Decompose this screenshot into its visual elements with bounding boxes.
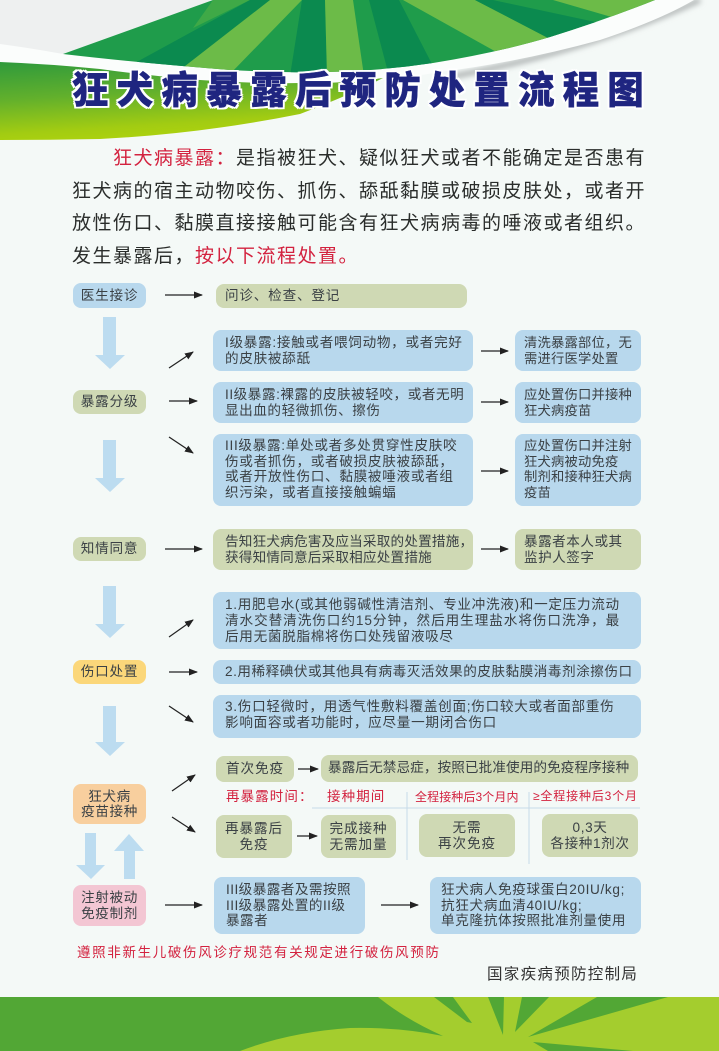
注射被动免疫制剂 label: 注射被动 <box>81 890 138 905</box>
暴露分级 label: 暴露分级 <box>81 394 138 409</box>
狂犬病疫苗接种 label: 疫苗接种 <box>81 804 138 819</box>
III级暴露 box: III级暴露:单处或者多处贯穿性皮肤咬 <box>225 438 457 453</box>
处置步骤3: 影响面容或者功能时，应尽量一期闭合伤口 <box>225 714 497 730</box>
处置步骤1 <box>213 592 641 649</box>
III级暴露者 box: 暴露者 <box>226 913 268 928</box>
发布机构: 国家疾病预防控制局 <box>487 966 638 983</box>
III级处置 box: 制剂和接种狂犬病 <box>524 469 632 484</box>
免疫制剂剂量 box: 狂犬病人免疫球蛋白20IU/kg; <box>441 882 625 897</box>
title: 狂犬病暴露后预防处置流程图 <box>72 69 652 112</box>
问诊 box <box>216 284 467 308</box>
再暴露后免疫 <box>216 815 292 858</box>
处置步骤1: 清水交替清洗伤口约15分钟，然后用生理盐水将伤口洗净，最 <box>225 613 620 628</box>
II级暴露 box <box>213 382 473 423</box>
无需再次免疫: 再次免疫 <box>438 836 496 850</box>
伤口处置 label <box>73 660 146 684</box>
intro text: 发生暴露后，按以下流程处置。 <box>72 246 359 267</box>
III级暴露者 box: III级暴露者及需按照 <box>226 882 351 897</box>
免疫制剂剂量 box <box>430 877 641 934</box>
III级暴露者 box <box>214 877 365 934</box>
首次免疫说明: 暴露后无禁忌症，按照已批准使用的免疫程序接种 <box>328 760 629 775</box>
III级处置 box: 应处置伤口并注射 <box>524 438 632 453</box>
table divider lines <box>312 792 640 864</box>
告知 box: 告知狂犬病危害及应当采取的处置措施， <box>225 534 473 549</box>
签字 box <box>515 529 641 570</box>
首次免疫: 首次免疫 <box>226 761 284 776</box>
II级处置 box: 狂犬病疫苗 <box>524 402 591 418</box>
注射被动免疫制剂 label: 免疫制剂 <box>81 906 138 920</box>
破伤风提示: 遵照非新生儿破伤风诊疗规范有关规定进行破伤风预防 <box>77 945 441 960</box>
intro text: 狂犬病暴露：是指被狂犬、疑似狂犬或者不能确定是否患有 <box>113 148 646 169</box>
III级暴露 box: 或者开放性伤口、黏膜被唾液或者组 <box>225 469 454 484</box>
intro text <box>72 148 646 267</box>
block arrows <box>76 317 144 879</box>
I级暴露 box <box>213 330 473 371</box>
intro text: 狂犬病的宿主动物咬伤、抓伤、舔舐黏膜或破损皮肤处，或者开 <box>72 181 646 202</box>
I级暴露 box: 的皮肤被舔舐 <box>225 350 311 366</box>
全程接种后3个月内: 全程接种后3个月内 <box>415 790 519 804</box>
签字 box: 监护人签字 <box>524 550 594 564</box>
完成接种: 完成接种 <box>330 821 387 836</box>
免疫制剂剂量 box: 单克隆抗体按照批准剂量使用 <box>441 913 626 928</box>
接种期间表头: 接种期间 <box>327 789 385 804</box>
I级处置 box <box>515 330 641 371</box>
III级暴露 box: 伤或者抓伤，或者破损皮肤被舔舐， <box>225 454 454 468</box>
处置步骤2: 2.用稀释碘伏或其他具有病毒灭活效果的皮肤黏膜消毒剂涂擦伤口 <box>225 664 633 679</box>
各接种1剂次 <box>542 814 638 857</box>
III级暴露者 box: III级暴露处置的II级 <box>226 898 345 912</box>
知情同意 label: 知情同意 <box>81 541 138 556</box>
I级处置 box: 清洗暴露部位，无 <box>524 335 632 350</box>
注射被动免疫制剂 label <box>73 885 146 926</box>
处置步骤3 <box>213 695 641 738</box>
I级暴露 box: I级暴露:接触或者喂饲动物，或者完好 <box>225 335 463 350</box>
全程接种后3个月以上: ≥全程接种后3个月 <box>533 789 638 803</box>
处置步骤3: 3.伤口轻微时，用透气性敷料覆盖创面;伤口较大或者面部重伤 <box>225 699 614 714</box>
III级处置 box: 疫苗 <box>524 484 551 500</box>
处置步骤2 <box>213 660 641 684</box>
II级暴露 box: II级暴露:裸露的皮肤被轻咬，或者无明 <box>225 387 464 402</box>
intro text: 放性伤口、黏膜直接接触可能含有狂犬病病毒的唾液或者组织。 <box>72 213 646 234</box>
医生接诊 row: 医生接诊 <box>81 288 138 303</box>
完成接种: 无需加量 <box>330 836 387 852</box>
II级处置 box <box>515 382 641 423</box>
狂犬病疫苗接种 label <box>73 784 146 824</box>
告知 box: 获得知情同意后采取相应处置措施 <box>225 550 432 564</box>
各接种1剂次: 0,3天 <box>573 820 607 835</box>
伤口处置 label: 伤口处置 <box>81 664 138 679</box>
III级暴露 box <box>213 434 473 506</box>
告知 box <box>213 529 473 570</box>
狂犬病疫苗接种 label: 狂犬病 <box>88 788 131 804</box>
各接种1剂次: 各接种1剂次 <box>550 836 630 850</box>
首次免疫说明 <box>321 755 638 782</box>
知情同意 label <box>73 537 146 561</box>
暴露分级 label <box>73 390 146 414</box>
问诊 box: 问诊、检查、登记 <box>225 288 340 303</box>
II级处置 box: 应处置伤口并接种 <box>524 387 632 402</box>
处置步骤1: 1.用肥皂水(或其他弱碱性清洁剂、专业冲洗液)和一定压力流动 <box>225 597 620 612</box>
医生接诊 row <box>73 283 146 308</box>
无需再次免疫 <box>419 814 515 857</box>
III级处置 box: 狂犬病被动免疫 <box>524 454 618 468</box>
III级处置 box <box>515 434 641 506</box>
再暴露后免疫: 再暴露后 <box>225 821 283 836</box>
再暴露时间表头: 再暴露时间： <box>226 789 314 804</box>
签字 box: 暴露者本人或其 <box>524 534 623 549</box>
I级处置 box: 需进行医学处置 <box>524 350 618 366</box>
首次免疫 <box>216 756 294 782</box>
免疫制剂剂量 box: 抗狂犬病血清40IU/kg; <box>441 898 582 912</box>
再暴露后免疫: 免疫 <box>239 836 268 852</box>
II级暴露 box: 显出血的轻微抓伤、擦伤 <box>225 402 381 418</box>
无需再次免疫: 无需 <box>452 820 481 835</box>
处置步骤1: 后用无菌脱脂棉将伤口处残留液吸尽 <box>225 629 454 644</box>
完成接种 <box>321 815 396 858</box>
III级暴露 box: 织污染，或者直接接触蝙蝠 <box>225 484 397 500</box>
